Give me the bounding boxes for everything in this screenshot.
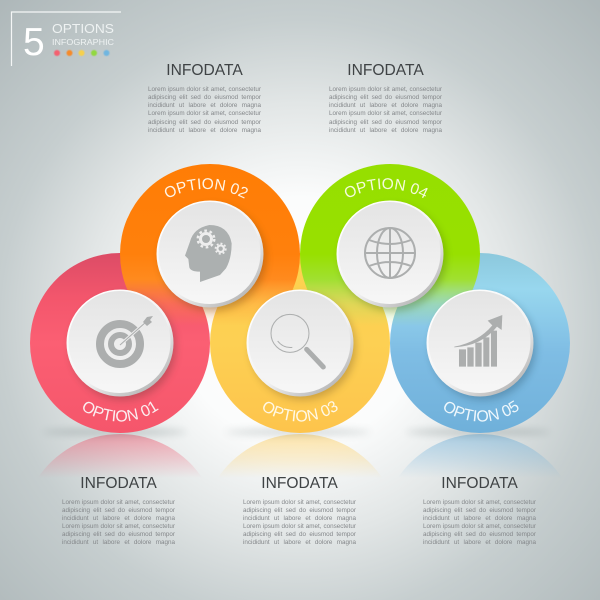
header badge xyxy=(12,12,121,66)
text block: bottom right xyxy=(423,474,536,546)
text block: top left: Lorem ipsum dolor sit amet, consectetur xyxy=(148,110,261,117)
text block: bottom center: adipiscing elit sed do eiusmod tempor xyxy=(243,507,356,514)
text block: bottom right: Lorem ipsum dolor sit amet, consectetur xyxy=(423,498,536,506)
text block: bottom center: adipiscing elit sed do eiusmod tempor xyxy=(243,531,356,538)
disc: option 02 xyxy=(156,200,266,311)
ground shadow: blue circle xyxy=(406,429,550,435)
text block: bottom left: incididunt ut labore et dolore magna xyxy=(62,539,175,546)
ground shadow: yellow circle xyxy=(226,429,370,435)
disc: option 03 xyxy=(246,290,356,400)
text block: bottom left: adipiscing elit sed do eiusmod tempor xyxy=(62,531,175,538)
text block: bottom left: Lorem ipsum dolor sit amet, consectetur xyxy=(62,498,175,506)
label: option 04: OPTION 04 xyxy=(344,178,428,198)
text block: top right: Lorem ipsum dolor sit amet, consectetur xyxy=(329,86,442,93)
text block: bottom right: adipiscing elit sed do eiusmod tempor xyxy=(423,531,536,538)
text block: top left: adipiscing elit sed do eiusmod tempor xyxy=(148,94,261,101)
text block: top right: incididunt ut labore et dolore magna xyxy=(329,102,442,109)
disc: option 01 xyxy=(66,290,176,400)
ring: option 02 xyxy=(120,164,300,344)
text block: bottom left xyxy=(62,474,175,546)
ring: option 05 xyxy=(390,253,570,433)
text: INFODATA xyxy=(347,62,424,79)
text block: top left xyxy=(148,62,261,134)
reflection: blue circle xyxy=(396,434,564,480)
text block: top right: adipiscing elit sed do eiusmod tempor xyxy=(329,119,442,126)
text block: bottom center: Lorem ipsum dolor sit amet, consectetur xyxy=(243,498,356,506)
icon: growth chart xyxy=(454,315,502,367)
text: INFODATA xyxy=(261,474,338,492)
text block: bottom center: incididunt ut labore et dolore magna xyxy=(243,515,356,522)
ground shadow: red circle xyxy=(43,429,187,435)
reflection: red circle xyxy=(36,434,204,480)
label: option 03: OPTION 03 xyxy=(263,401,338,422)
text block: bottom right: incididunt ut labore et dolore magna xyxy=(423,539,536,546)
icon: globe xyxy=(365,228,415,278)
text block: bottom left: incididunt ut labore et dolore magna xyxy=(62,515,175,522)
text block: top right xyxy=(329,62,442,134)
text block: top right: adipiscing elit sed do eiusmod tempor xyxy=(329,94,442,101)
text block: top left: Lorem ipsum dolor sit amet, consectetur xyxy=(148,86,261,93)
text block: top right: Lorem ipsum dolor sit amet, consectetur xyxy=(329,110,442,117)
reflection: yellow circle xyxy=(216,434,384,480)
text block: bottom right: Lorem ipsum dolor sit amet, consectetur xyxy=(423,523,536,530)
ring: option 01 xyxy=(30,253,210,433)
text block: bottom center xyxy=(243,474,356,546)
disc: option 04 xyxy=(336,200,446,311)
icon: head with gears xyxy=(185,225,232,282)
text block: bottom right: incididunt ut labore et dolore magna xyxy=(423,515,536,522)
icon: magnifying glass xyxy=(271,314,323,367)
header badge: INFOGRAPHIC xyxy=(52,38,114,47)
text block: top left: incididunt ut labore et dolore magna xyxy=(148,127,261,134)
text block: bottom center: Lorem ipsum dolor sit amet, consectetur xyxy=(243,523,356,530)
text block: bottom left: adipiscing elit sed do eiusmod tempor xyxy=(62,507,175,514)
ring: option 03 xyxy=(210,253,390,433)
text block: bottom left: Lorem ipsum dolor sit amet, consectetur xyxy=(62,523,175,530)
label: option 01: OPTION 01 xyxy=(83,402,159,422)
label: option 02: OPTION 02 xyxy=(164,178,248,198)
ring: option 04 xyxy=(300,164,480,344)
text: INFODATA xyxy=(441,474,518,492)
text block: top right: incididunt ut labore et dolore magna xyxy=(329,127,442,134)
disc: option 05 xyxy=(426,290,536,400)
header badge: OPTIONS xyxy=(52,22,114,36)
text block: bottom right: adipiscing elit sed do eiusmod tempor xyxy=(423,507,536,514)
text block: bottom center: incididunt ut labore et dolore magna xyxy=(243,539,356,546)
label: option 05: OPTION 05 xyxy=(444,400,518,422)
icon: target with arrow xyxy=(100,316,153,364)
text: INFODATA xyxy=(166,62,243,79)
text block: top left: adipiscing elit sed do eiusmod tempor xyxy=(148,119,261,126)
text: INFODATA xyxy=(80,474,157,492)
header badge: 5 xyxy=(23,21,45,64)
text block: top left: incididunt ut labore et dolore magna xyxy=(148,102,261,109)
